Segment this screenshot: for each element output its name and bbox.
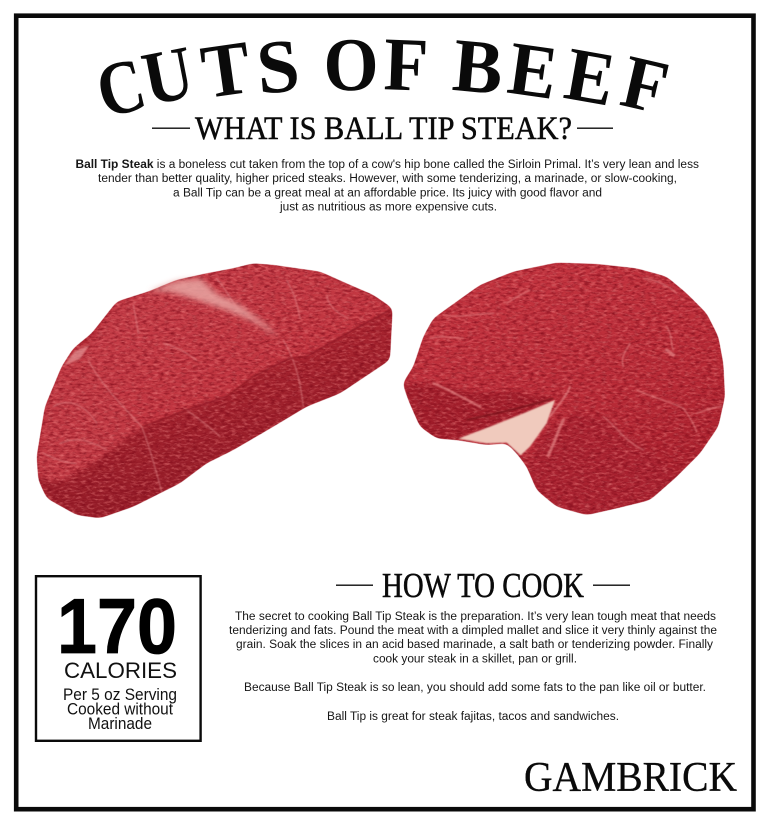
title: cuts of beef: T bbox=[196, 25, 256, 115]
calories label: CALORIES bbox=[64, 658, 177, 683]
photo: ball tip steak, side view bbox=[37, 263, 393, 518]
calories box bbox=[36, 576, 201, 741]
title: cuts of beef: S bbox=[253, 23, 303, 111]
title: cuts of beef: U bbox=[136, 30, 200, 122]
photo: ball tip steak, round view bbox=[403, 263, 725, 515]
title: cuts of beef: C bbox=[88, 42, 154, 135]
cooking instructions: grain. Soak the slices in an acid based marinade, a salt bath or tenderizing powder. Finally bbox=[236, 639, 713, 651]
title: cuts of beef: F bbox=[382, 23, 429, 108]
steak top face bbox=[88, 263, 393, 427]
title: cuts of beef: E bbox=[559, 32, 621, 123]
subtitle: what is ball tip steak: WHAT IS BALL TIP STEAK? bbox=[195, 111, 572, 147]
intro paragraph: a Ball Tip can be a great meal at an affordable price. Its juicy with good flavor and bbox=[173, 188, 602, 200]
marbling on round steak bbox=[430, 278, 722, 455]
title: cuts of beef: B bbox=[450, 23, 506, 111]
title: cuts of beef: O bbox=[323, 22, 379, 107]
fat cap on steak bbox=[148, 278, 280, 338]
round steak outline bbox=[403, 263, 725, 515]
serving note: Per 5 oz Serving bbox=[63, 685, 177, 704]
cooking instructions: Ball Tip is great for steak fajitas, tacos and sandwiches. bbox=[327, 711, 619, 723]
shadow crease beneath upper lobe bbox=[467, 398, 553, 420]
steak end face bbox=[37, 345, 143, 482]
pale marbling streaks bbox=[43, 278, 348, 492]
calorie number: 170 bbox=[57, 582, 177, 670]
intro paragraph: tender than better quality, higher priced steaks. However, with some tenderizing, a marinade, or slow-cooking, bbox=[98, 173, 677, 185]
cooking instructions: cook your steak in a skillet, pan or grill. bbox=[373, 654, 577, 666]
intro paragraph: Ball Tip Steak is a boneless cut taken from the top of a cow's hip bone called the Sirloin Primal. It’s very lean and less bbox=[76, 159, 699, 171]
serving note: Cooked without bbox=[67, 700, 173, 718]
serving note: Marinade bbox=[88, 714, 152, 733]
cooking instructions: tenderizing and fats. Pound the meat with a dimpled mallet and slice it very thinly against the bbox=[229, 625, 717, 637]
intro paragraph bbox=[76, 159, 699, 214]
lower lobe bbox=[528, 413, 677, 515]
intro paragraph: just as nutritious as more expensive cuts. bbox=[279, 202, 497, 214]
serving note bbox=[63, 685, 177, 733]
cooking instructions: Because Ball Tip Steak is so lean, you should add some fats to the pan like oil or butter. bbox=[244, 682, 706, 694]
cooking instructions: The secret to cooking Ball Tip Steak is the preparation. It’s very lean tough meat that needs bbox=[235, 611, 716, 623]
brand logo: gambrick: GAMBRICK bbox=[524, 755, 737, 801]
heading: how to cook: HOW TO COOK bbox=[382, 566, 584, 605]
title: cuts of beef: E bbox=[503, 26, 563, 116]
cooking instructions bbox=[229, 611, 717, 723]
title: cuts of beef bbox=[88, 22, 676, 135]
under-lip bbox=[403, 383, 553, 440]
dark crease along cut edge bbox=[143, 310, 390, 427]
exposed fat bbox=[458, 400, 555, 455]
steak outline and side face bbox=[37, 263, 393, 518]
title: cuts of beef: F bbox=[614, 39, 676, 131]
